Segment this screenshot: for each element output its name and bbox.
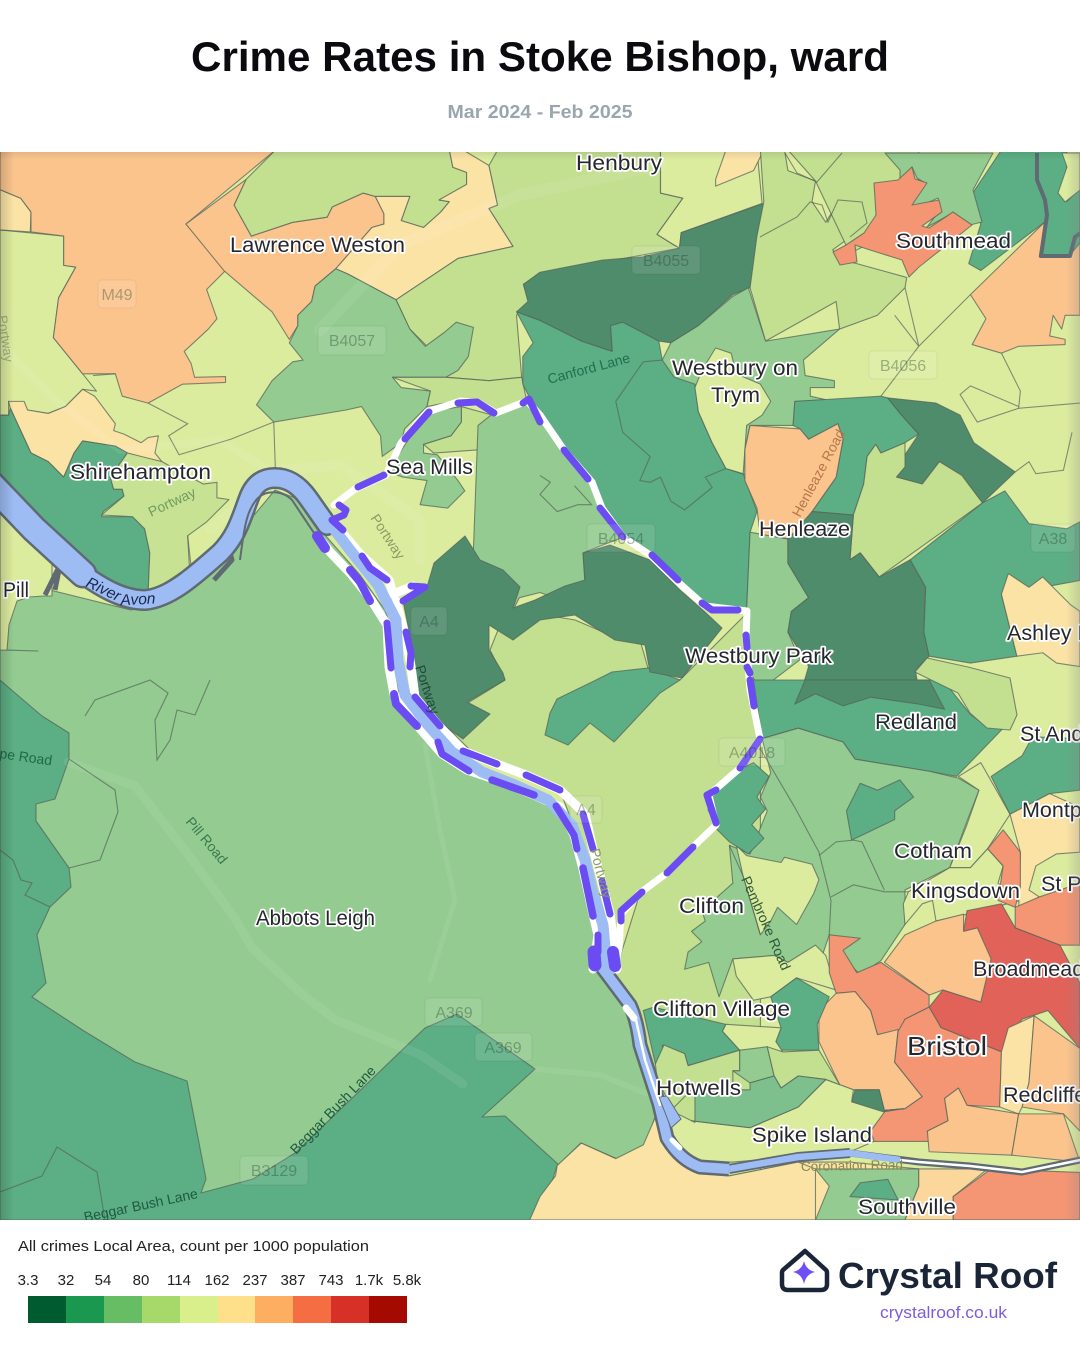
place labels: Southmead (896, 229, 1011, 253)
river avon (0, 478, 1080, 1172)
choropleth map (0, 152, 1080, 1220)
legend tick values: 54 (95, 1272, 111, 1289)
place labels: Redland (875, 710, 957, 734)
legend tick values: 114 (167, 1272, 191, 1289)
road name labels: Portway (367, 511, 408, 562)
road name labels: pe Road (0, 745, 53, 768)
place labels: Henleaze (759, 517, 850, 541)
place labels: Kingsdown (911, 879, 1020, 903)
road name labels: Beggar Bush Lane (82, 1185, 199, 1225)
road name labels: Portway (412, 663, 443, 716)
place labels: Westbury on (672, 356, 798, 380)
region: Abbots Leigh south bank (0, 490, 690, 1220)
place labels: Southville (858, 1195, 956, 1219)
subtitle: date range: Mar 2024 - Feb 2025 (448, 102, 632, 122)
road name labels: Pembroke Road (738, 874, 794, 973)
road name labels: Coronation Road (801, 1157, 903, 1174)
place labels: Trym (711, 383, 760, 407)
place labels: Lawrence Weston (230, 233, 405, 257)
place labels: Westbury Park (685, 644, 832, 668)
legend tick values: 5.8k (393, 1272, 422, 1289)
road name labels: Portway (587, 847, 616, 900)
road shields: A4018 (729, 745, 775, 762)
road shields (98, 246, 1075, 1185)
road shields: A4 (576, 802, 596, 819)
region group: north-east (471, 150, 1080, 690)
region: southern bank by Southville (530, 1117, 815, 1220)
region group: Southmead and north-east corner (760, 153, 1080, 277)
region: Southmead (833, 167, 972, 277)
icon: house with star (782, 1251, 827, 1290)
road name labels: Beggar Bush Lane (287, 1062, 379, 1157)
road shields: B4057 (329, 333, 375, 350)
road name labels: Portway (146, 484, 198, 520)
legend tick values: 237 (242, 1272, 268, 1289)
legend tick values: 387 (280, 1272, 306, 1289)
legend (18, 1238, 422, 1323)
road shields: B3129 (251, 1163, 297, 1180)
road name labels (0, 316, 902, 1265)
wordmark: Crystal Roof (838, 1255, 1058, 1296)
road name labels: River Avon (86, 578, 155, 606)
region group: central Bristol (616, 680, 1080, 1220)
place labels: Cotham (894, 839, 972, 863)
legend tick values (18, 1272, 422, 1289)
place labels: Sea Mills (386, 455, 473, 479)
ward dashes (317, 399, 760, 966)
road shields: A369 (484, 1040, 522, 1057)
legend tick values: 162 (204, 1272, 230, 1289)
logo: Crystal Roof (782, 1251, 1058, 1322)
ward boundary: Stoke Bishop (317, 399, 760, 975)
road name labels: Canford Lane (546, 349, 632, 387)
legend tick values: 32 (58, 1272, 74, 1289)
road shields: A4 (419, 614, 439, 631)
legend tick values: 80 (133, 1272, 149, 1289)
map edge shading (0, 152, 1080, 1220)
road name labels: Pill Road (183, 814, 231, 867)
legend colour scale (28, 1296, 407, 1323)
place labels: Shirehampton (70, 460, 211, 484)
website: crystalroof.co.uk (880, 1304, 1008, 1322)
region group: north-west (0, 150, 683, 594)
place labels (3, 151, 1080, 1219)
region: pale block east of Redland (915, 658, 1017, 730)
place labels: Spike Island (752, 1123, 872, 1147)
legend tick values: 3.3 (18, 1272, 38, 1289)
place labels: Bristol (907, 1031, 987, 1061)
road name labels: Henleaze Road (789, 427, 848, 519)
road shields: B4055 (643, 253, 689, 270)
outline lines in south bank (0, 165, 660, 1220)
road shields: M49 (101, 287, 133, 304)
legend tick values: 1.7k (355, 1272, 384, 1289)
place labels: Clifton (679, 894, 744, 918)
road shields: B4054 (598, 531, 644, 548)
place labels: Pill (3, 578, 29, 602)
place labels: Clifton Village (653, 997, 790, 1021)
road shields: A38 (1039, 531, 1067, 548)
region group: central ward interior (403, 536, 756, 928)
place labels: Hotwells (656, 1076, 741, 1100)
title: Crime Rates in Stoke Bishop, ward (191, 33, 889, 80)
legend tick values: 743 (318, 1272, 344, 1289)
road shields: B4056 (880, 358, 926, 375)
place labels: Abbots Leigh (256, 906, 375, 930)
legend title: All crimes Local Area, count per 1000 population (18, 1238, 369, 1255)
road shields: A369 (435, 1005, 473, 1022)
place labels: Henbury (576, 151, 662, 175)
